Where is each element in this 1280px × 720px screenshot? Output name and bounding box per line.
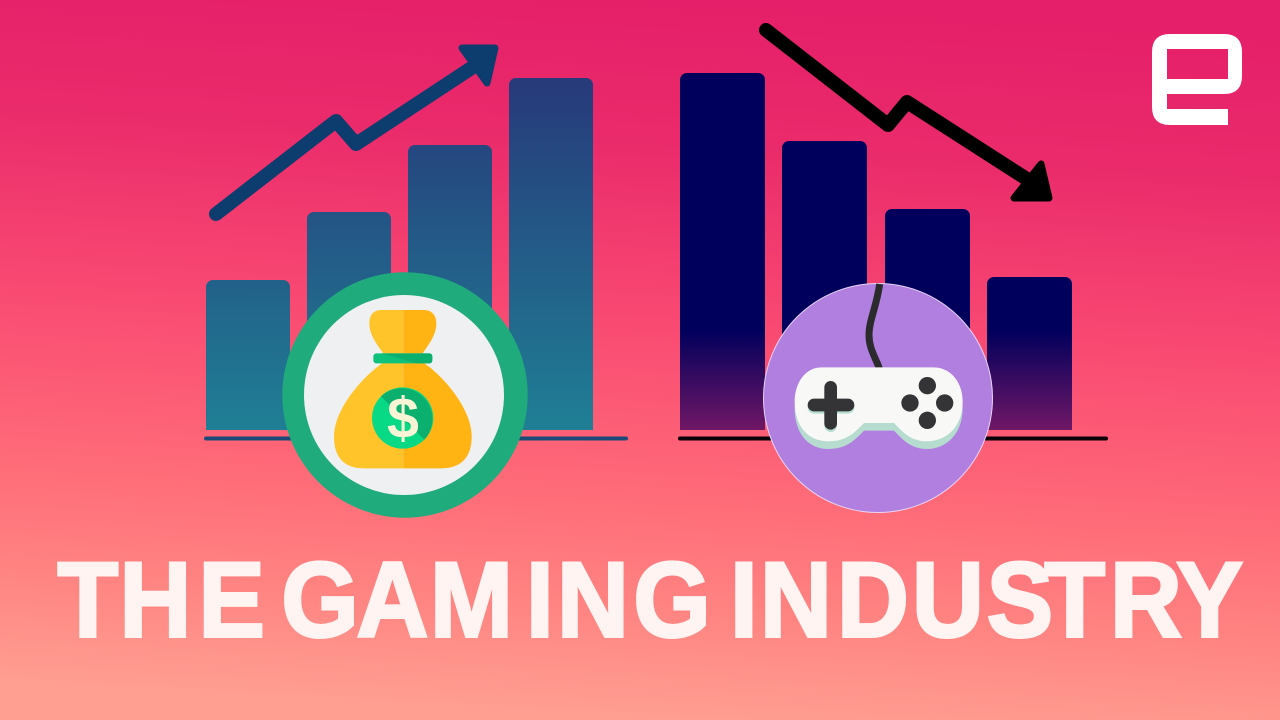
coin <box>372 387 433 449</box>
arrow: rising <box>216 48 495 214</box>
controller shadow <box>795 375 963 449</box>
bar 4 <box>987 277 1072 430</box>
bag tie <box>373 353 432 363</box>
bag neck <box>369 310 403 353</box>
bag body <box>334 363 403 468</box>
title: THE GAMING INDUSTRY <box>57 539 1243 659</box>
controller body <box>795 367 963 441</box>
icon: game controller badge <box>764 284 992 512</box>
bar 1 <box>206 280 290 430</box>
bar 4 <box>509 78 593 430</box>
bar 3 <box>408 145 492 430</box>
controller cable <box>869 284 880 368</box>
logo: Engadget e <box>1152 34 1242 125</box>
baseline <box>678 436 1108 440</box>
dollar sign: $ <box>387 387 419 451</box>
chart: rising bars <box>204 78 628 440</box>
bar 2 <box>307 212 391 430</box>
icon: money bag badge <box>282 272 528 518</box>
baseline <box>204 436 628 440</box>
bar 1 <box>680 73 765 430</box>
chart: falling bars <box>678 73 1108 440</box>
bar 3 <box>885 209 970 430</box>
buttons <box>919 377 936 394</box>
arrow: falling <box>766 30 1049 198</box>
d-pad <box>814 390 848 426</box>
bar 2 <box>782 141 867 430</box>
